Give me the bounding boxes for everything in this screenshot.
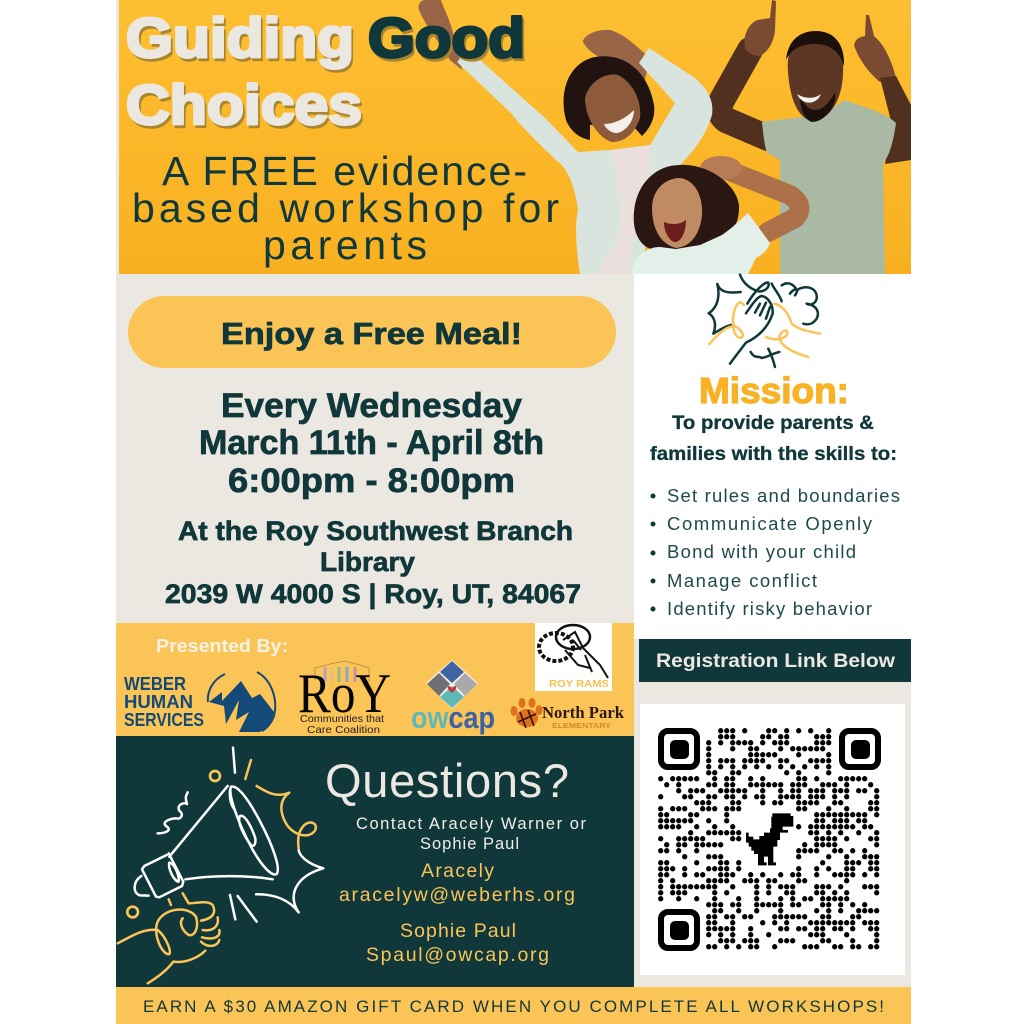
mission statement: families with the skills to: xyxy=(650,444,897,465)
logo: Roy Rams: ROY RAMS xyxy=(549,678,609,690)
presented by label: Presented By: xyxy=(156,636,288,656)
footer banner xyxy=(116,987,911,1024)
event date and time: 6:00pm - 8:00pm xyxy=(228,462,515,500)
skills list: Set rules and boundaries xyxy=(667,485,900,506)
title: Guiding xyxy=(126,6,354,69)
event location: 2039 W 4000 S | Roy, UT, 84067 xyxy=(165,579,581,609)
logo: Weber Human Services xyxy=(124,672,275,732)
panel: presented by xyxy=(116,623,634,736)
subtitle: based workshop for xyxy=(132,185,559,231)
mission statement: To provide parents & xyxy=(672,413,874,434)
logo: OWCAP: owcap xyxy=(411,700,495,735)
panel: QR code xyxy=(634,682,911,987)
contact intro: Sophie Paul xyxy=(420,835,519,853)
title: Good xyxy=(370,9,527,72)
event location: Library xyxy=(320,547,415,577)
panel: event details xyxy=(116,274,634,623)
registration banner xyxy=(639,639,911,682)
footer banner: EARN A $30 AMAZON GIFT CARD WHEN YOU COMPLETE ALL WORKSHOPS! xyxy=(143,997,884,1016)
title xyxy=(126,6,527,139)
icon: dinosaur xyxy=(746,813,793,865)
subtitle: A FREE evidence- xyxy=(162,148,527,194)
skills list xyxy=(650,485,900,619)
event date and time xyxy=(199,387,544,500)
mission heading: Mission: xyxy=(699,370,849,411)
contact intro: Contact Aracely Warner or xyxy=(356,815,586,833)
contact intro xyxy=(356,815,586,853)
contact Aracely: aracelyw@weberhs.org xyxy=(339,884,575,906)
logo: North Park Elementary xyxy=(510,698,625,730)
icon: hands high five xyxy=(709,275,820,367)
logo: Roy Communities that Care: Care Coalition xyxy=(307,724,380,736)
photo: man xyxy=(720,0,911,274)
subtitle xyxy=(132,148,559,268)
contact Sophie: Spaul@owcap.org xyxy=(366,944,549,966)
skills list: Communicate Openly xyxy=(667,513,873,534)
QR dots xyxy=(661,731,877,947)
logo: Weber Human Services: HUMAN xyxy=(124,692,193,712)
logo: OWCAP xyxy=(411,660,495,735)
header banner with photo xyxy=(119,0,911,274)
questions heading: Questions? xyxy=(325,754,569,807)
logo: Weber Human Services: WEBER xyxy=(124,674,186,694)
subtitle: parents xyxy=(263,222,427,268)
logo: North Park Elementary: ELEMENTARY xyxy=(552,721,611,730)
registration banner: Registration Link Below xyxy=(656,651,895,672)
event location xyxy=(165,516,581,609)
logo: Roy Rams xyxy=(535,623,612,691)
skills list: Identify risky behavior xyxy=(667,598,872,619)
mission statement xyxy=(650,413,897,465)
QR finder squares xyxy=(661,731,878,948)
contact Sophie: Sophie Paul xyxy=(400,920,516,942)
logo: Roy Communities that Care: RoY xyxy=(298,663,391,725)
title: Choices xyxy=(128,76,364,139)
skills list: Bond with your child xyxy=(667,541,856,562)
title: Guiding xyxy=(128,9,356,72)
panel: questions xyxy=(116,736,634,987)
panel: mission xyxy=(634,274,911,639)
logo: Roy Communities that Care: Communities that xyxy=(300,713,384,725)
free meal pill xyxy=(128,296,616,368)
icon: megaphone xyxy=(118,748,323,983)
free meal pill: Enjoy a Free Meal! xyxy=(221,316,522,351)
title: Choices xyxy=(126,73,362,136)
event date and time: March 11th - April 8th xyxy=(199,424,544,462)
title: Good xyxy=(368,6,525,69)
event date and time: Every Wednesday xyxy=(221,387,522,425)
logo: Weber Human Services: SERVICES xyxy=(124,710,204,730)
contact Aracely xyxy=(339,860,575,906)
photo: woman xyxy=(419,0,712,274)
logo: North Park Elementary: North Park xyxy=(542,703,625,722)
contact Aracely: Aracely xyxy=(421,860,494,882)
contact Sophie xyxy=(366,920,549,966)
event location: At the Roy Southwest Branch xyxy=(178,516,573,546)
photo: girl xyxy=(631,156,799,274)
skills list: Manage conflict xyxy=(667,570,817,591)
